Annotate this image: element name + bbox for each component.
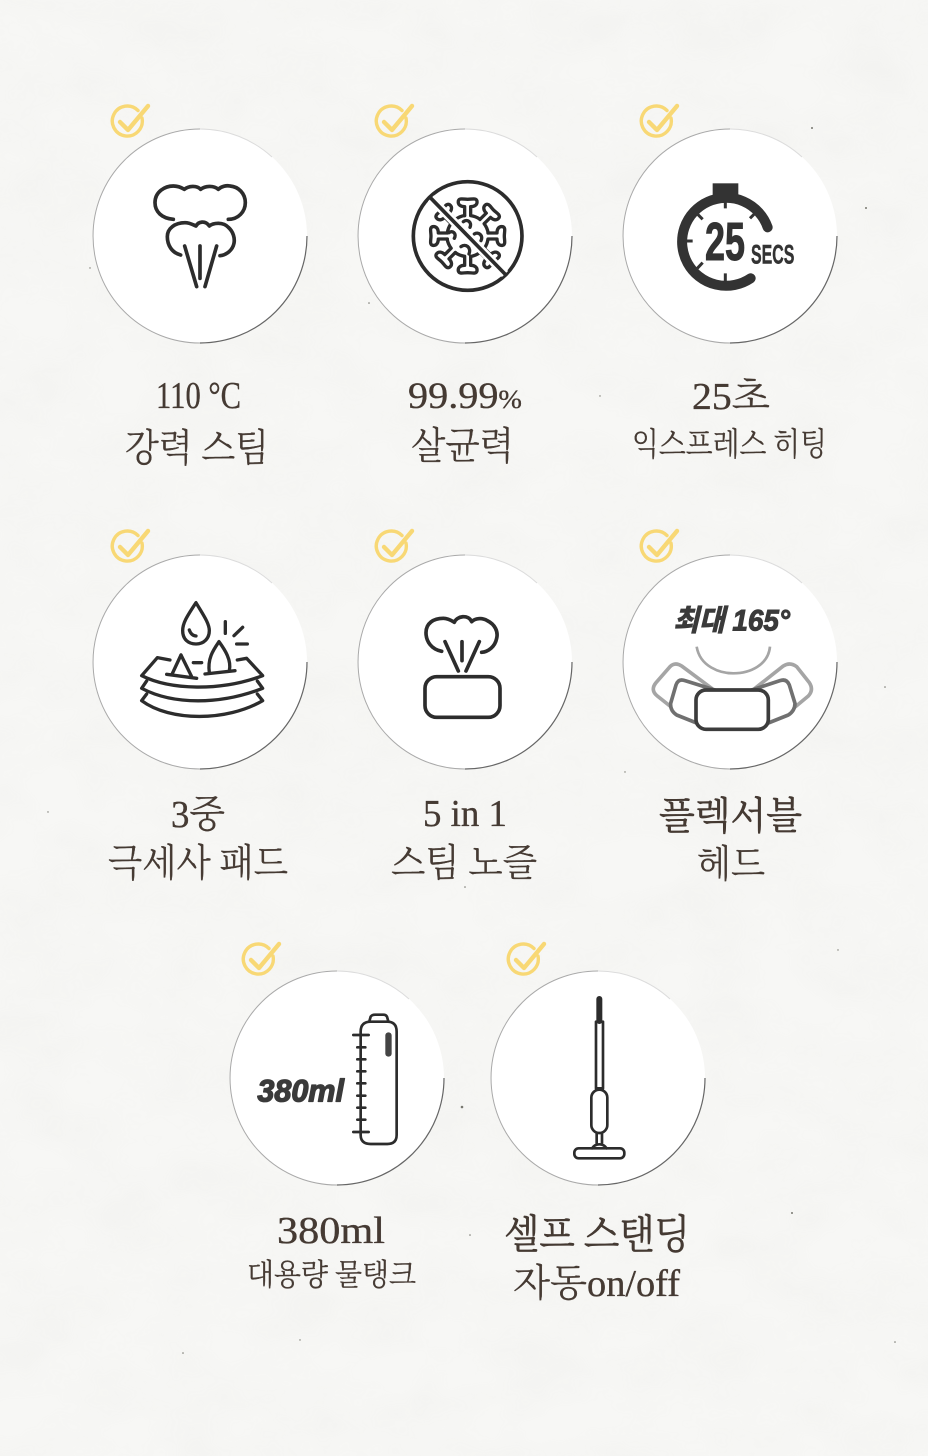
check badge <box>641 531 677 561</box>
label: large water tank: 대용량 물탱크 <box>247 1259 416 1292</box>
value: 380ml: 380ml <box>277 1210 385 1252</box>
heading: self standing: 셀프 스탠딩 <box>504 1212 690 1257</box>
check badge <box>641 106 677 136</box>
check badge <box>112 106 148 136</box>
label: steam nozzle: 스팀 노즐 <box>391 843 537 885</box>
icon: water tank <box>257 1015 397 1144</box>
icon: drops on layered pad <box>142 603 263 716</box>
value: 3 layer: 3중 <box>171 794 225 836</box>
icon: steam nozzle <box>425 617 500 717</box>
check badge <box>508 944 544 974</box>
icon: no virus <box>413 182 522 290</box>
label: strong steam: 강력 스팀 <box>125 428 269 470</box>
feature: triple microfiber pad <box>93 531 307 885</box>
value: 110 C: 110 °C <box>156 375 241 417</box>
icon: 25 secs timer <box>682 183 794 286</box>
feature: 25 sec heating <box>623 106 837 462</box>
check badge <box>376 106 412 136</box>
check badge <box>243 944 279 974</box>
label: auto on/off: 자동on/off <box>513 1263 680 1305</box>
icon: 165 degree head <box>653 605 811 729</box>
icon text: max 165: 최대 165° <box>673 605 790 638</box>
value: 5 in 1: 5 in 1 <box>423 793 507 835</box>
icon text: 380ml: 380ml <box>257 1074 345 1109</box>
check badge <box>112 531 148 561</box>
label: microfiber pad: 극세사 패드 <box>108 843 288 885</box>
feature: 5 in 1 nozzle <box>358 531 572 885</box>
label: express heating: 익스프레스 히팅 <box>632 426 827 462</box>
icon: steam clouds <box>155 186 245 287</box>
label: sterilizing power: 살균력 <box>411 426 514 468</box>
feature: 380ml tank <box>230 944 444 1292</box>
label: head: 헤드 <box>697 844 765 886</box>
heading: flexible: 플렉서블 <box>659 796 802 838</box>
icon: 25 secs timer: SECS <box>751 239 794 269</box>
value: 25 sec: 25초 <box>692 376 770 418</box>
feature: 99.99 sterilization <box>358 106 572 468</box>
icon: 25 secs timer: 25 <box>705 213 745 272</box>
feature: 110C steam <box>93 106 307 470</box>
value: 99.99%: 99.99 % <box>408 376 522 417</box>
check badge <box>376 531 412 561</box>
feature: flexible head <box>623 531 837 886</box>
feature: self standing <box>491 944 705 1305</box>
icon: upright mop <box>574 999 624 1158</box>
